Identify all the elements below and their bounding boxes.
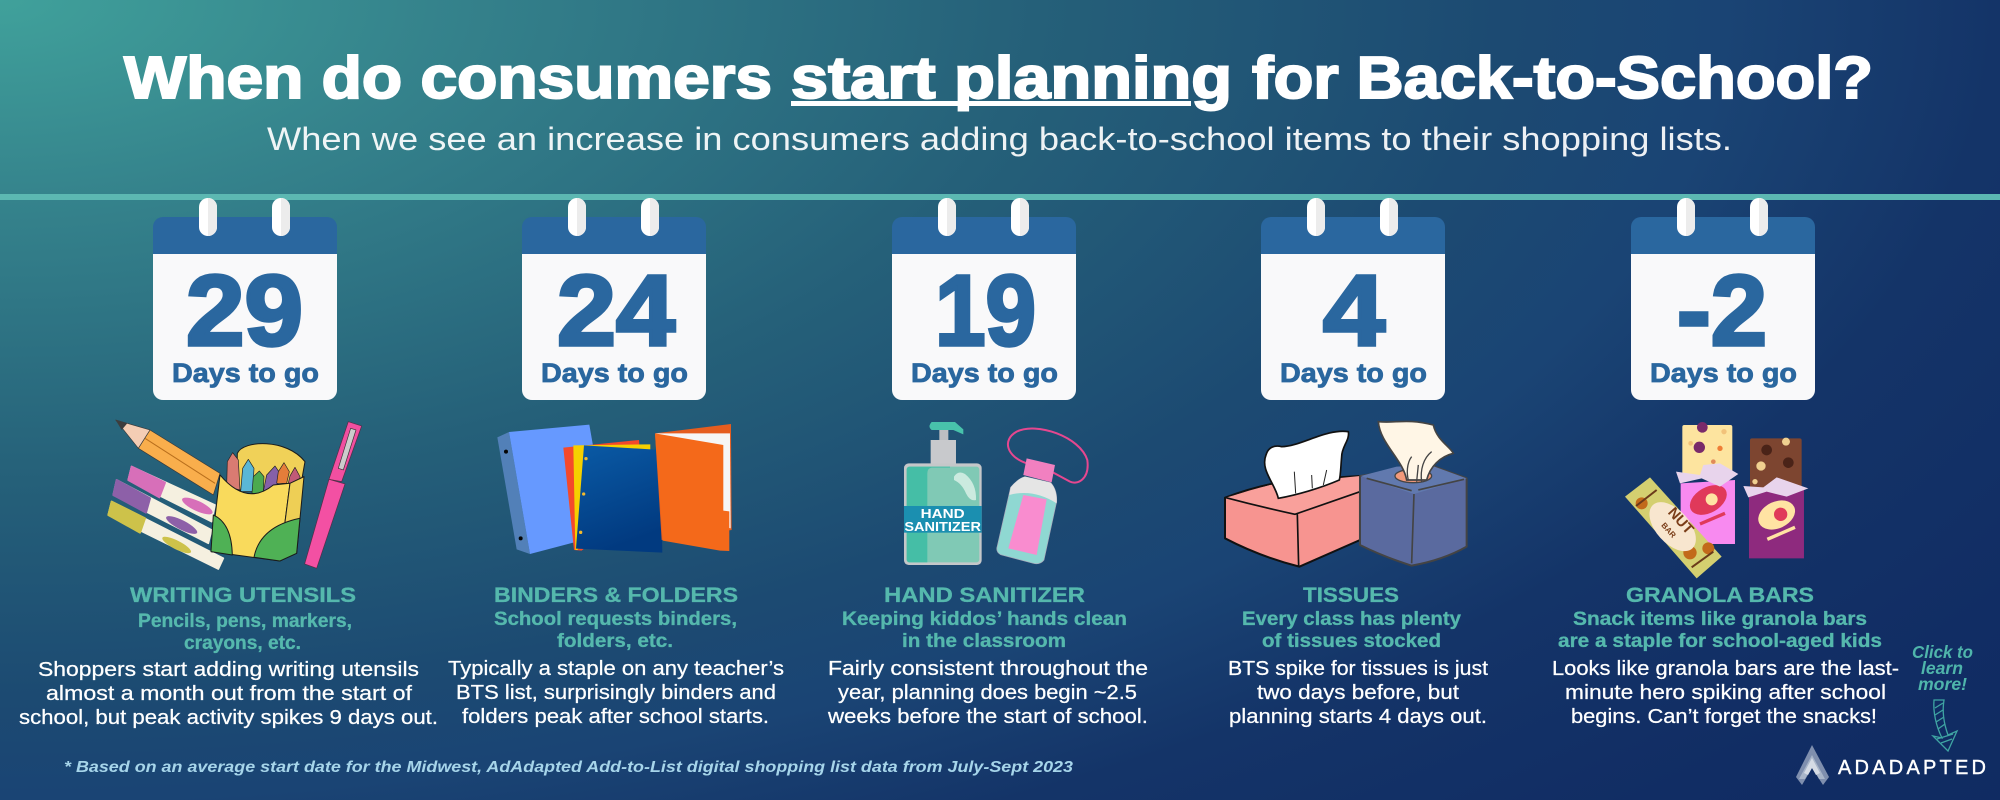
section: binders and folders xyxy=(448,583,784,728)
icon: granola bars: NUT xyxy=(1664,505,1696,538)
section: writing utensils: school, but peak activity spikes 9 days out. xyxy=(19,706,438,729)
icon: hand sanitizer xyxy=(904,422,1088,565)
section: granola bars: Looks like granola bars are the last- xyxy=(1552,657,1899,680)
section: writing utensils: Shoppers start adding writing utensils xyxy=(38,658,419,681)
section: granola bars: minute hero spiking after school xyxy=(1565,681,1886,704)
callout: click to learn more: learn xyxy=(1921,658,1963,678)
title: When do consumers xyxy=(124,45,772,111)
section: tissues: of tissues stocked xyxy=(1262,631,1441,652)
section: hand sanitizer: year, planning does begin ~2.5 xyxy=(838,681,1137,704)
icon: hand sanitizer: SANITIZER xyxy=(904,520,981,534)
title xyxy=(124,45,1873,111)
section: granola bars: GRANOLA BARS xyxy=(1626,583,1814,607)
calendar: 4 days: 4 xyxy=(1323,255,1385,367)
calendar: 24 days: Days to go xyxy=(541,358,688,388)
calendar: -2 days xyxy=(1631,198,1815,400)
calendar: 24 days: 24 xyxy=(557,255,675,367)
logo: AdAdapted: ADADAPTED xyxy=(1838,757,1986,779)
icon: granola bars: BAR xyxy=(1659,521,1678,540)
section: binders and folders: BTS list, surprisingly binders and xyxy=(456,681,776,704)
section: hand sanitizer xyxy=(827,583,1148,728)
title: for Back-to-School? xyxy=(1252,45,1873,111)
section: granola bars: are a staple for school-aged kids xyxy=(1558,631,1882,652)
section: hand sanitizer: Keeping kiddos’ hands clean xyxy=(842,609,1127,630)
title: start planning xyxy=(791,45,1232,111)
calendar: 19 days: Days to go xyxy=(911,358,1058,388)
section: tissues xyxy=(1228,583,1488,728)
calendar: 4 days: Days to go xyxy=(1280,358,1427,388)
calendar: 24 days xyxy=(522,198,706,400)
section: tissues: TISSUES xyxy=(1303,583,1399,607)
footnote: * Based on an average start date for the Midwest, AdAdapted Add-to-List digital shopping list data from July-Sept 2023 xyxy=(64,759,1073,776)
callout: click to learn more: Click to xyxy=(1912,642,1973,662)
calendar: -2 days: -2 xyxy=(1677,255,1767,367)
section: tissues: two days before, but xyxy=(1257,681,1459,704)
section: writing utensils: Pencils, pens, markers, xyxy=(138,611,352,632)
calendar: -2 days: Days to go xyxy=(1650,358,1797,388)
icon: tissue boxes xyxy=(1225,421,1467,567)
subtitle: When we see an increase in consumers adding back-to-school items to their shopping lists. xyxy=(267,121,1732,157)
section: binders and folders: School requests binders, xyxy=(494,609,737,630)
calendar: 19 days: 19 xyxy=(935,255,1036,367)
section: binders and folders: Typically a staple on any teacher’s xyxy=(448,657,784,680)
logo: AdAdapted xyxy=(1796,745,1986,785)
icon: hand sanitizer: HAND xyxy=(921,507,965,521)
icon: binders and folders xyxy=(497,424,732,554)
section: hand sanitizer: in the classroom xyxy=(902,631,1066,652)
calendar: 19 days xyxy=(892,198,1076,400)
section: granola bars xyxy=(1552,583,1899,728)
section: hand sanitizer: HAND SANITIZER xyxy=(884,583,1086,607)
section: binders and folders: BINDERS & FOLDERS xyxy=(494,583,738,607)
calendar: 4 days xyxy=(1261,198,1445,400)
section: binders and folders: folders, etc. xyxy=(557,631,673,652)
icon: granola bars xyxy=(1625,422,1808,578)
section: tissues: Every class has plenty xyxy=(1242,609,1461,630)
section: writing utensils xyxy=(19,583,438,729)
section: granola bars: Snack items like granola bars xyxy=(1573,609,1867,630)
section: tissues: planning starts 4 days out. xyxy=(1229,705,1487,728)
section: writing utensils: almost a month out from the start of xyxy=(46,682,412,705)
calendar: 29 days xyxy=(153,198,337,400)
calendar: 29 days: Days to go xyxy=(172,358,319,388)
section: hand sanitizer: Fairly consistent throughout the xyxy=(828,657,1148,680)
calendar: 29 days: 29 xyxy=(186,255,303,367)
section: granola bars: begins. Can’t forget the snacks! xyxy=(1571,705,1877,728)
section: tissues: BTS spike for tissues is just xyxy=(1228,657,1488,680)
section: binders and folders: folders peak after school starts. xyxy=(462,705,769,728)
arrow: pointing down xyxy=(1933,700,1957,751)
callout: click to learn more xyxy=(1912,642,1973,694)
section: writing utensils: crayons, etc. xyxy=(184,633,301,654)
section: writing utensils: WRITING UTENSILS xyxy=(130,583,356,607)
section: hand sanitizer: weeks before the start of school. xyxy=(827,705,1148,728)
callout: click to learn more: more! xyxy=(1918,674,1967,694)
icon: writing utensils xyxy=(108,420,362,569)
